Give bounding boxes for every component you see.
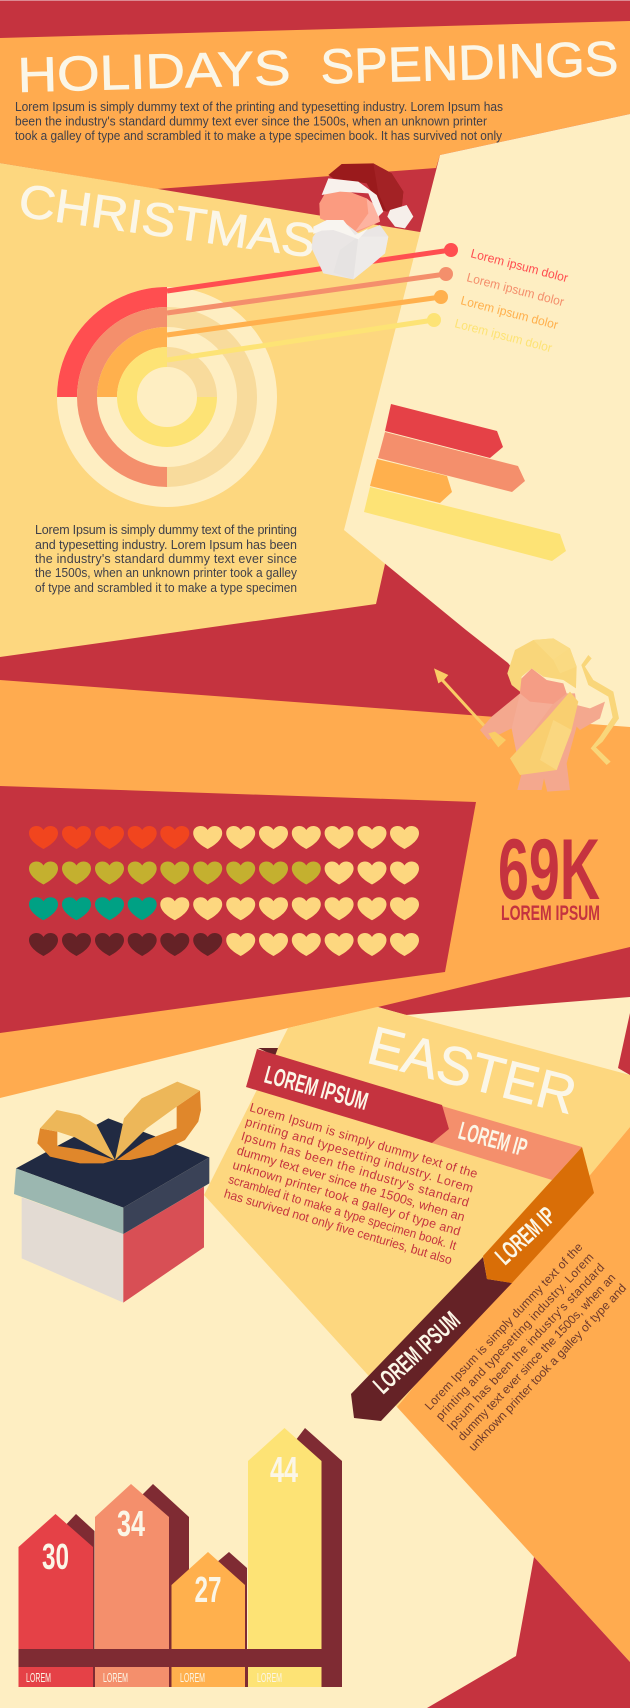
legend labels [453, 246, 570, 355]
christmas text block: of type and scrambled it to make a type specimen [35, 581, 297, 595]
easter text block red: unknown printer took a galley of type and [231, 1158, 462, 1239]
bar: 44 [248, 1428, 322, 1649]
ribbon: diagonal [351, 1147, 594, 1421]
easter text block dark: Ipsum has been the industry's standard [444, 1260, 607, 1433]
leader lines with dots [167, 243, 458, 360]
ribbon: horizontal: LOREM IP [455, 1117, 530, 1162]
bar shadows [18, 1428, 342, 1687]
title: HOLIDAYS [17, 41, 291, 103]
christmas text block: the 1500s, when an unknown printer took a galley [35, 566, 298, 580]
bar labels [26, 1671, 282, 1685]
easter text block dark [422, 1240, 629, 1454]
panel: easter background [204, 1007, 630, 1407]
heading: christmas: CHRISTMAS [16, 173, 319, 268]
bar values: 27 [194, 1569, 222, 1610]
bar values: 30 [42, 1536, 69, 1577]
panel: crimson sliver right [618, 1013, 630, 1075]
bar labels: LOREM [26, 1671, 51, 1685]
bar: 30 [18, 1514, 93, 1649]
christmas text block: the industry's standard dummy text ever since [35, 552, 297, 566]
easter text block dark: unknown printer took a galley of type and [466, 1281, 629, 1454]
bar: 34 [95, 1484, 169, 1649]
donut chart [57, 287, 277, 507]
bar labels: LOREM [180, 1671, 205, 1685]
bar labels: LOREM [257, 1671, 282, 1685]
christmas text block: and typesetting industry. Lorem Ipsum has been [35, 538, 297, 552]
panel: christmas background [0, 163, 440, 657]
easter text block red: has survived not only five centuries, but also [222, 1187, 454, 1267]
bar values: 44 [270, 1449, 298, 1490]
ribbon: diagonal: LOREM IP [490, 1202, 561, 1270]
row 2 hearts [29, 862, 419, 884]
title [17, 32, 619, 103]
easter text block dark: printing and typesetting industry. Lorem [433, 1250, 596, 1423]
row 4 hearts [29, 933, 419, 956]
bar chart [18, 1428, 342, 1687]
icon: santa [312, 163, 413, 279]
legend labels: Lorem ipsum dolor [453, 316, 554, 355]
ribbon: diagonal: LOREM IPSUM [368, 1306, 466, 1399]
panel: right cream area [344, 114, 630, 740]
heading: easter: EASTER [362, 1015, 582, 1126]
legend labels: Lorem ipsum dolor [459, 293, 560, 332]
row 1 hearts [29, 826, 419, 849]
heart grid [29, 826, 419, 956]
bar: 27 [172, 1552, 245, 1649]
panel: orange lower right [397, 1127, 630, 1662]
panel: hearts background [0, 786, 476, 1033]
christmas text block: Lorem Ipsum is simply dummy text of the printing [35, 523, 297, 537]
intro text: been the industry's standard dummy text ever since the 1500s, when an unknown printer [15, 114, 487, 128]
footer cells [18, 1667, 322, 1687]
title: SPENDINGS [320, 32, 619, 95]
icon: gift box [14, 1082, 209, 1303]
panel: orange middle band [0, 680, 630, 1098]
panel: lower cream background [0, 997, 630, 1708]
panel: crimson corner bottom right [427, 1557, 630, 1708]
easter text block red: dummy text ever since the 1500s, when an [235, 1143, 466, 1224]
ribbon: horizontal: LOREM IPSUM [261, 1061, 371, 1116]
easter text block dark: dummy text ever since the 1500s, when an [455, 1271, 618, 1444]
easter text block dark: Lorem Ipsum is simply dummy text of the [422, 1240, 586, 1413]
row 3 hearts [29, 897, 419, 920]
easter text block red: Ipsum has been the industry's standard [239, 1129, 471, 1210]
intro text: took a galley of type and scrambled it to make a type specimen book. It has survived not only [15, 129, 503, 143]
intro text: Lorem Ipsum is simply dummy text of the printing and typesetting industry. Lorem Ipsum has [15, 100, 503, 114]
legend labels: Lorem ipsum dolor [469, 246, 570, 285]
christmas bar chart [364, 404, 566, 561]
icon: cupid [434, 638, 619, 792]
bar values [42, 1449, 298, 1610]
bar values: 34 [117, 1503, 145, 1544]
christmas text block [35, 523, 298, 595]
legend labels: Lorem ipsum dolor [465, 270, 566, 309]
intro text [15, 100, 503, 143]
bar labels: LOREM [103, 1671, 128, 1685]
easter text block red [222, 1100, 480, 1267]
panel: header band [0, 21, 630, 189]
easter text block red: scrambled it to make a type specimen book. It [227, 1172, 458, 1253]
easter text block red: printing and typesetting industry. Lorem [244, 1115, 475, 1195]
easter text block red: Lorem Ipsum is simply dummy text of the [248, 1100, 479, 1181]
ribbon: horizontal [246, 1048, 582, 1180]
